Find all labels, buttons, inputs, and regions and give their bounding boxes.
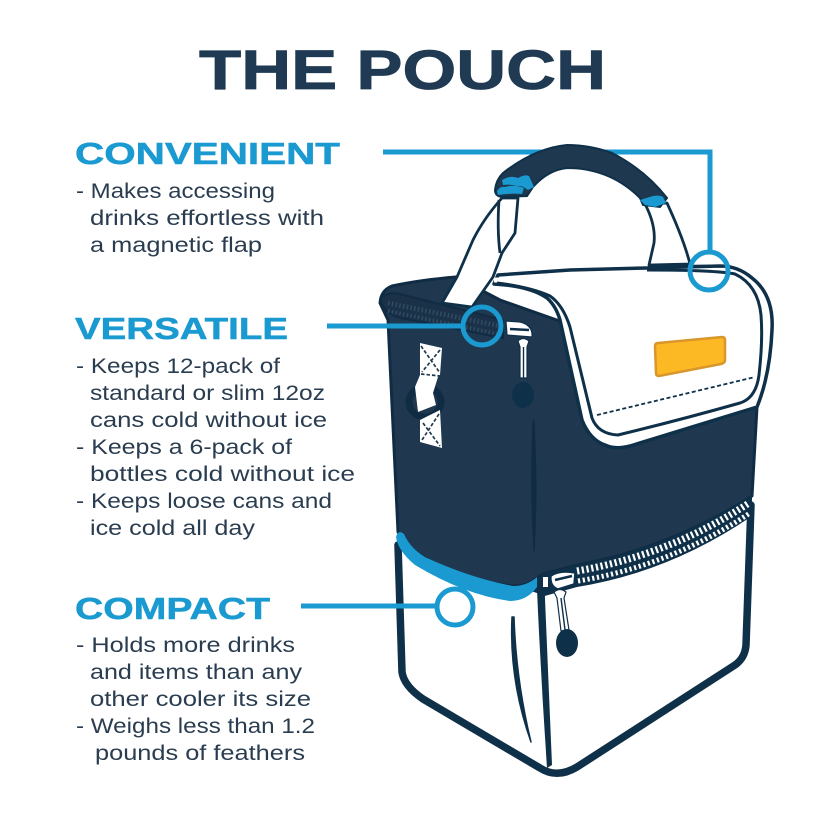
- bag dark upper body: [380, 277, 757, 586]
- top zipper rim: [381, 293, 503, 338]
- flap stitching: [597, 377, 755, 415]
- bag lower compartment: [398, 505, 751, 773]
- yellow patch: [655, 337, 725, 376]
- lower zipper pull: [543, 572, 578, 657]
- heading: convenient: CONVENIENT: [75, 136, 340, 171]
- blue grip left: [502, 175, 534, 190]
- illustration: cooler bag: [380, 145, 772, 773]
- text block: convenient details: a magnetic flap: [90, 233, 262, 257]
- callout line: convenient (passes behind handle): [383, 152, 710, 252]
- text block: versatile details: ice cold all day: [90, 516, 255, 540]
- heading: compact: COMPACT: [75, 591, 270, 626]
- panel: versatile: [75, 311, 355, 540]
- lower zipper: [541, 495, 752, 597]
- text block: compact details: pounds of feathers: [95, 741, 305, 765]
- panel: convenient: [75, 136, 340, 257]
- handle: [495, 145, 667, 207]
- text block: versatile details: cans cold without ice: [90, 408, 327, 432]
- blue grip right: [640, 196, 666, 207]
- text block: versatile details: [76, 354, 355, 540]
- panel: compact: [75, 591, 315, 765]
- blue compact band: [396, 532, 537, 601]
- text block: convenient details: drinks effortless with: [90, 206, 324, 230]
- top zipper pull: [506, 321, 534, 408]
- side crease upper: [532, 420, 536, 553]
- text block: compact details: [76, 633, 315, 765]
- text block: convenient details: [76, 179, 324, 257]
- text block: compact details: other cooler its size: [90, 687, 311, 711]
- text block: compact details: - Holds more drinks: [76, 633, 295, 657]
- callout: versatile line and ring: [327, 307, 501, 345]
- text block: versatile details: standard or slim 12oz: [90, 381, 325, 405]
- text block: versatile details: - Keeps 12-pack of: [76, 354, 280, 378]
- callout: compact line and ring: [301, 589, 473, 625]
- side crease lower: [512, 617, 531, 742]
- text block: versatile details: - Keeps loose cans and: [76, 489, 332, 513]
- flap: [494, 266, 772, 448]
- side carry loop: [409, 343, 442, 448]
- text block: versatile details: - Keeps a 6-pack of: [76, 435, 292, 459]
- text block: compact details: and items than any: [90, 660, 302, 684]
- straps: [442, 198, 730, 307]
- bag front corner seam: [537, 575, 552, 768]
- text block: versatile details: bottles cold without ice: [90, 462, 355, 486]
- title: THE POUCH: [199, 38, 606, 101]
- callout: convenient ring: [690, 252, 728, 290]
- heading: versatile: VERSATILE: [75, 311, 288, 346]
- text block: compact details: - Weighs less than 1.2: [76, 714, 315, 738]
- text block: convenient details: - Makes accessing: [76, 179, 275, 203]
